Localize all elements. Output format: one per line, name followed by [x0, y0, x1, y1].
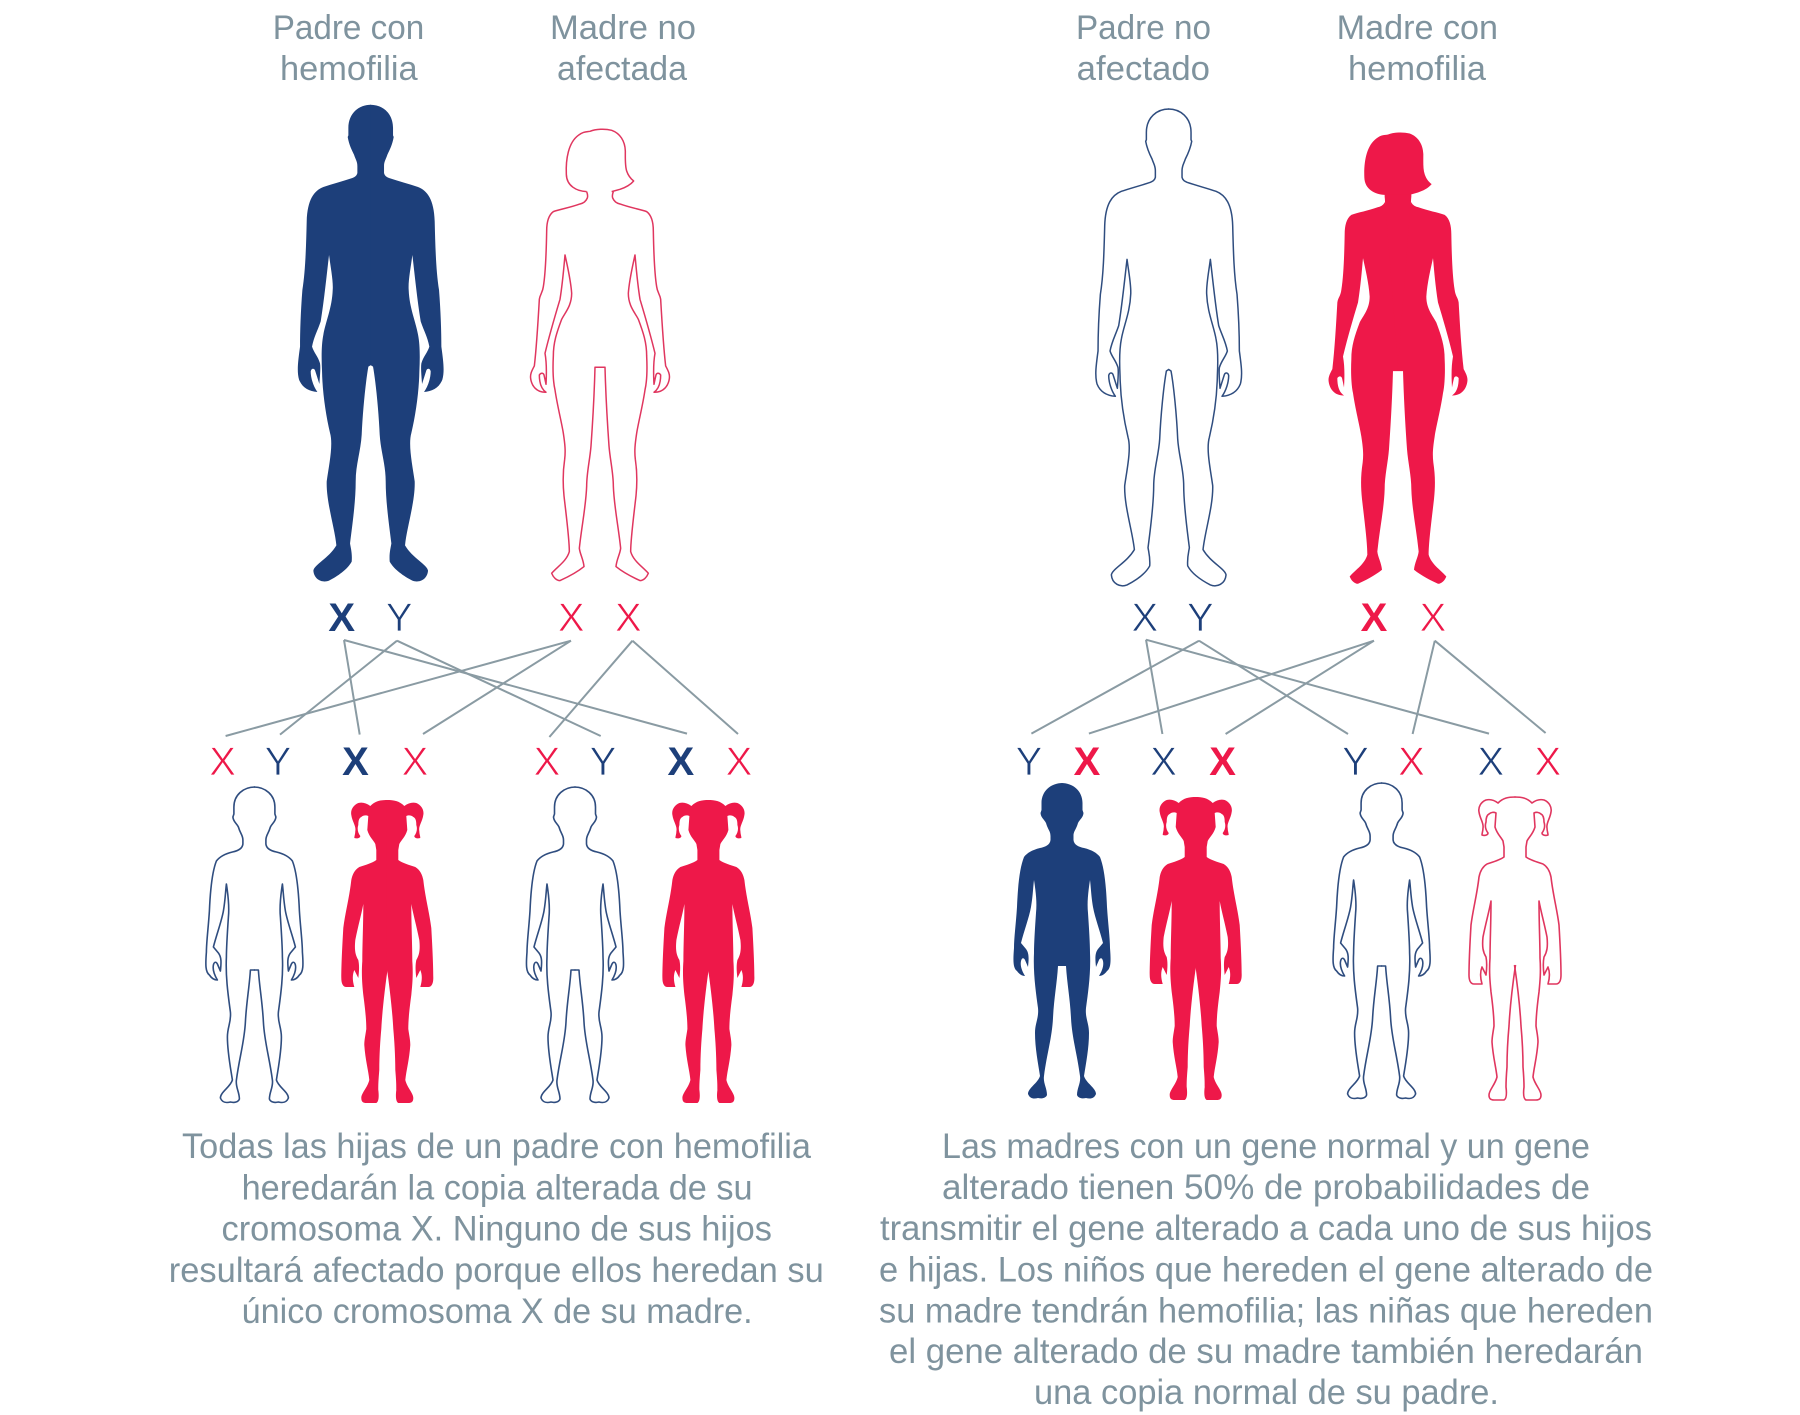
parent chromosomes: X: [1361, 596, 1388, 640]
icon: mother filled pink: [1329, 132, 1467, 584]
child chromosomes: X: [1209, 740, 1236, 784]
child chromosomes: Y: [1016, 740, 1042, 784]
text block: explanation mother: Las madres con un gene normal y un gene: [942, 1127, 1590, 1166]
parent chromosomes: X: [558, 596, 585, 640]
text block: explanation father: único cromosoma X de su madre.: [242, 1292, 753, 1331]
text block: explanation mother: [879, 1127, 1653, 1412]
text block: explanation father: Todas las hijas de un padre con hemofilia: [182, 1127, 812, 1166]
icon: son outline: [526, 787, 624, 1103]
heading: madre no afectada: [550, 9, 696, 88]
parent chromosomes: Y: [1187, 596, 1214, 640]
child chromosomes: X: [1398, 740, 1425, 784]
child chromosomes: X: [1074, 740, 1101, 784]
icon: father navy outline: [1096, 109, 1242, 586]
parent chromosomes: X: [615, 596, 642, 640]
heading: padre con hemofilia: hemofilia: [280, 50, 418, 88]
child chromosomes: X: [1150, 740, 1177, 784]
child chromosomes: Y: [1342, 740, 1369, 784]
child chromosomes: X: [1477, 740, 1504, 784]
parent chromosomes: [328, 596, 642, 640]
inheritance lines: [226, 640, 738, 737]
heading: padre no afectado: afectado: [1077, 50, 1210, 88]
icon: son filled navy: [1013, 783, 1111, 1099]
text block: explanation mother: e hijas. Los niños que hereden el gene alterado de: [879, 1250, 1653, 1290]
icon: mother pink outline: [531, 129, 669, 581]
icon: son outline: [206, 787, 303, 1103]
text block: explanation mother: transmitir el gene alterado a cada uno de sus hijos: [880, 1209, 1652, 1248]
text block: explanation father: cromosoma X. Ninguno de sus hijos: [222, 1210, 772, 1248]
text block: explanation father: resultará afectado porque ellos heredan su: [169, 1251, 824, 1290]
text block: explanation mother: alterado tienen 50% de probabilidades de: [942, 1168, 1590, 1207]
parent chromosomes: Y: [386, 596, 413, 640]
child chromosomes: X: [402, 740, 428, 784]
heading: madre con hemofilia: hemofilia: [1348, 50, 1486, 88]
icon: father filled navy: [298, 105, 444, 582]
heading: padre no afectado: [1076, 9, 1211, 88]
icon: son outline: [1333, 783, 1430, 1099]
text block: explanation mother: el gene alterado de su madre también heredarán: [889, 1332, 1643, 1371]
child chromosomes: Y: [590, 740, 616, 784]
inheritance lines: [1031, 640, 1546, 734]
child chromosomes: X: [342, 740, 369, 784]
child chromosomes: [1016, 740, 1561, 784]
child chromosomes: [209, 740, 752, 784]
heading: padre no afectado: Padre no: [1076, 9, 1211, 47]
heading: madre no afectada: afectada: [557, 50, 687, 88]
parent chromosomes: X: [1420, 596, 1446, 640]
parent chromosomes: [1131, 596, 1446, 640]
panel: madre con hemofilia: [879, 9, 1653, 1412]
heading: madre no afectada: Madre no: [550, 9, 696, 47]
icon: daughter filled pink: [341, 800, 433, 1103]
icon: daughter pink outline: [1469, 797, 1561, 1100]
text block: explanation mother: una copia normal de su padre.: [1034, 1373, 1499, 1412]
heading: madre con hemofilia: Madre con: [1337, 9, 1498, 47]
heading: padre con hemofilia: [273, 9, 424, 88]
text block: explanation mother: su madre tendrán hemofilia; las niñas que hereden: [879, 1292, 1653, 1330]
text block: explanation father: heredarán la copia alterada de su: [242, 1168, 753, 1208]
text block: explanation father: [169, 1127, 824, 1331]
panel: padre con hemofilia: [169, 9, 824, 1331]
child chromosomes: X: [667, 740, 694, 784]
icon: daughter filled pink: [1150, 797, 1242, 1100]
heading: padre con hemofilia: Padre con: [273, 9, 424, 47]
child chromosomes: Y: [265, 740, 291, 784]
parent chromosomes: X: [328, 596, 355, 640]
heading: madre con hemofilia: [1337, 9, 1498, 88]
child chromosomes: X: [726, 740, 752, 784]
child chromosomes: X: [1534, 740, 1561, 784]
parent chromosomes: X: [1131, 596, 1158, 640]
icon: daughter filled pink: [662, 800, 754, 1103]
child chromosomes: X: [209, 740, 236, 784]
child chromosomes: X: [534, 740, 560, 784]
